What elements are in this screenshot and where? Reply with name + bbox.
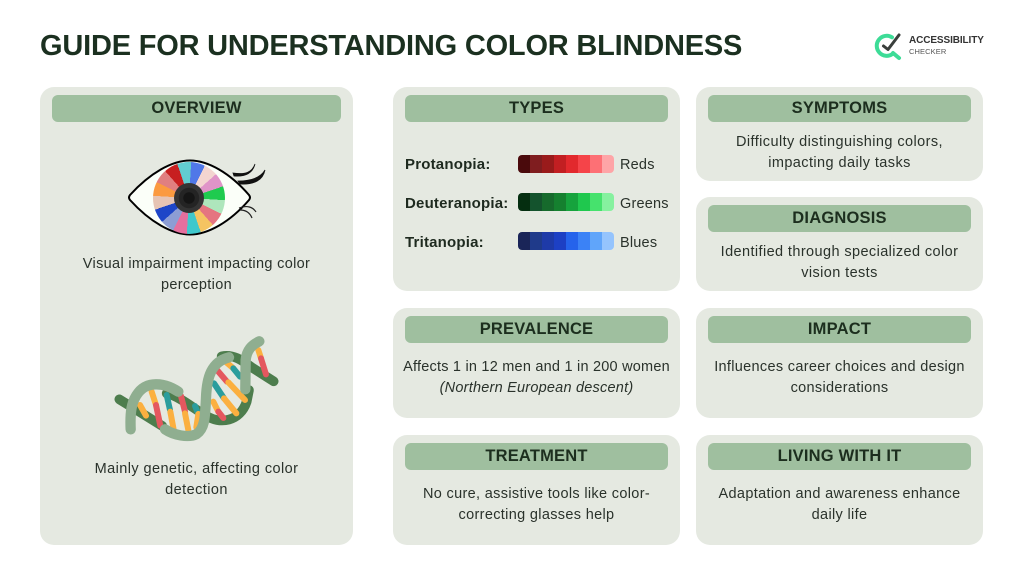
label: deuteranopia: Deuteranopia: [405,195,508,212]
panel: overview [40,87,353,545]
text: living with it: daily life [812,507,867,523]
text: prevalence: (Northern European descent) [440,380,633,396]
heading: treatment: TREATMENT [485,447,588,465]
heading: impact [708,316,971,343]
label: blues: Blues [620,235,657,251]
heading: overview: OVERVIEW [151,99,242,117]
swatch: greens [518,193,614,211]
swatch: reds [518,155,614,173]
heading: living with it: LIVING WITH IT [778,447,901,465]
front strands [130,341,259,436]
heading: symptoms: SYMPTOMS [792,99,887,117]
text: eye description [82,256,310,293]
label: greens: Greens [620,196,669,212]
text: eye description: perception [161,277,232,293]
heading: symptoms [708,95,971,122]
text: prevalence: Affects 1 in 12 men and 1 in 200 women [403,359,670,375]
heading: prevalence [405,316,668,343]
panel: symptoms [696,87,983,181]
icon: eye with multicolour iris [128,160,266,236]
text: eye description: Visual impairment impacting color [83,256,310,272]
text: dna description: Mainly genetic, affecting color [95,461,298,477]
text: impact: considerations [791,380,888,396]
rungs [140,350,266,433]
logo text: CHECKER [909,47,946,56]
logo text [909,35,984,56]
heading: prevalence: PREVALENCE [480,320,593,338]
text: treatment [423,486,650,523]
text: treatment: No cure, assistive tools like color- [423,486,650,502]
text: symptoms [736,134,943,171]
text: impact [714,359,965,396]
heading: diagnosis: DIAGNOSIS [792,209,887,227]
swatch: blues [518,232,614,250]
text: diagnosis [721,244,958,281]
label: protanopia: Protanopia: [405,156,491,173]
text: living with it: Adaptation and awareness enhance [719,486,960,502]
panel: treatment [393,435,680,545]
heading: impact: IMPACT [808,320,871,338]
logo: accessibility checker [874,33,984,60]
text: dna description [95,461,298,498]
logo text: ACCESSIBILITY [909,35,984,46]
text: impact: Influences career choices and design [714,359,965,375]
text: prevalence [403,359,670,396]
text: treatment: correcting glasses help [459,507,614,523]
heading: living with it [708,443,971,470]
row: protanopia [405,155,655,173]
panel: prevalence [393,308,680,418]
heading: treatment [405,443,668,470]
text: dna description: detection [165,482,228,498]
title: GUIDE FOR UNDERSTANDING COLOR BLINDNESS [40,30,742,62]
row: tritanopia [405,232,657,251]
iris colour wheel [153,162,225,234]
text: symptoms: impacting daily tasks [768,155,911,171]
icon: dna helix [114,336,278,442]
panel: diagnosis [696,197,983,291]
text: diagnosis: Identified through specialized color [721,244,958,260]
text: living with it [718,486,960,523]
panel: impact [696,308,983,418]
panel: types [393,87,680,291]
text: symptoms: Difficulty distinguishing colors, [736,134,943,150]
icon: magnifier with check [874,33,902,60]
heading: diagnosis [708,205,971,232]
label: tritanopia: Tritanopia: [405,234,484,251]
row: deuteranopia [405,193,669,212]
back strands [119,356,274,426]
pupil [174,182,204,212]
text: diagnosis: vision tests [801,265,878,281]
heading: overview [52,95,341,122]
label: reds: Reds [620,157,655,173]
heading: types: TYPES [509,99,564,117]
panel: living with it [696,435,983,545]
heading: types [405,95,668,122]
